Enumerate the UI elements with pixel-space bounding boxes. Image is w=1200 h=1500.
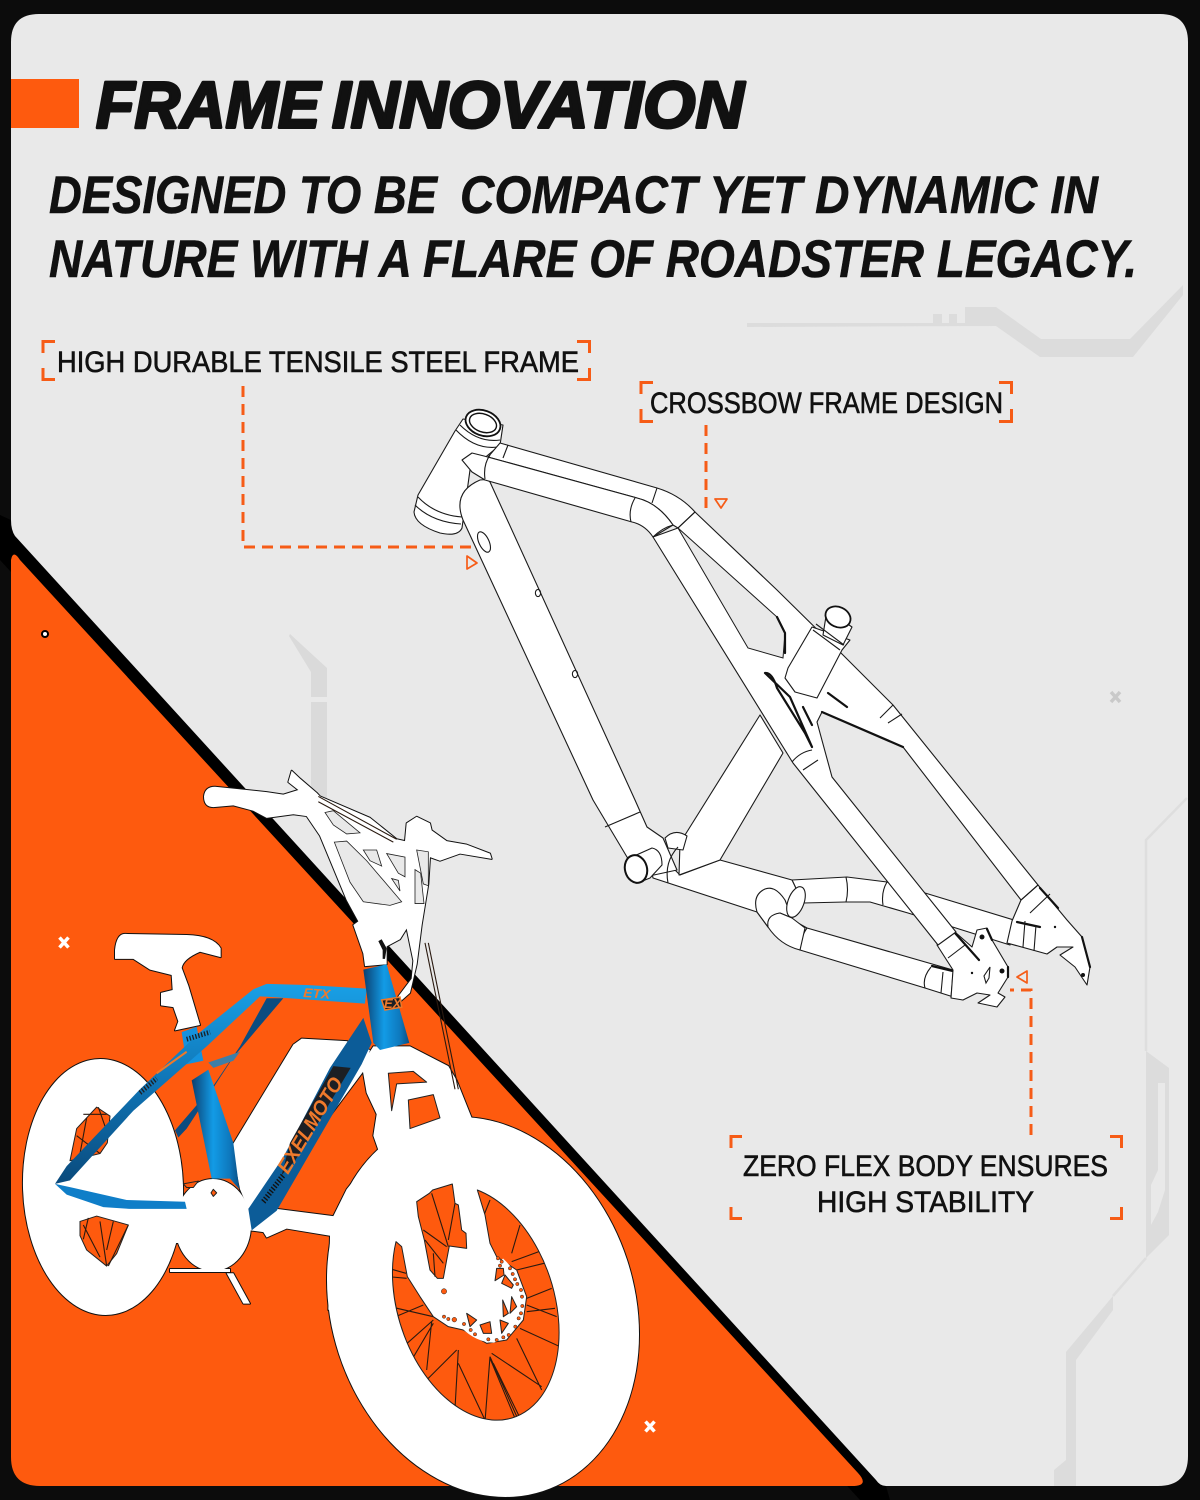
arrow: crossbow frame bbox=[715, 499, 727, 508]
head tube bbox=[414, 405, 504, 534]
front wheel openings and spokes bbox=[388, 1184, 560, 1422]
blue frame bbox=[55, 964, 409, 1230]
brake rotor bbox=[441, 1257, 524, 1342]
arrow: zero flex body bbox=[1017, 971, 1027, 983]
title accent block bbox=[11, 79, 79, 128]
bike illustration bbox=[19, 771, 687, 1500]
near rear dropout bbox=[937, 928, 1008, 1007]
down tube bbox=[248, 1018, 372, 1230]
sparkle: white cross bottom bbox=[646, 1422, 654, 1432]
lower top tube bbox=[462, 453, 673, 537]
callout brackets and label: tensile steel frame: HIGH DURABLE TENSILE STEEL FRAME bbox=[57, 346, 579, 379]
seat tube strut bbox=[679, 715, 783, 875]
bottom bracket shell bbox=[622, 832, 687, 885]
handlebar openings and cables bbox=[318, 796, 458, 1089]
orange diagonal panel bbox=[11, 554, 863, 1486]
seat collar bbox=[785, 602, 854, 698]
top tube and seat stay bbox=[55, 984, 367, 1184]
callout brackets and label: zero flex body: ZERO FLEX BODY ENSURES bbox=[743, 1150, 1108, 1183]
decoration: circuit line top right bbox=[747, 285, 1183, 357]
sparkle: grey cross bbox=[1111, 692, 1120, 702]
bike silhouette outline bbox=[19, 771, 687, 1500]
title: INNOVATION bbox=[332, 68, 745, 142]
rear half details and blue frame bbox=[55, 796, 458, 1266]
bike silhouette fill bbox=[19, 771, 687, 1500]
callout brackets and label: zero flex body: HIGH STABILITY bbox=[817, 1186, 1034, 1219]
upper top tube bbox=[488, 443, 695, 528]
title: FRAME bbox=[96, 68, 322, 142]
leader line: crossbow frame bbox=[704, 425, 708, 508]
far chain stay bbox=[792, 877, 1017, 945]
frame logo ETX: ETX bbox=[303, 985, 332, 1002]
seat stay and crossbow gusset bbox=[653, 512, 1038, 945]
subtitle bbox=[49, 166, 1137, 289]
head tube logo: EX bbox=[384, 996, 403, 1011]
far rear dropout bbox=[1007, 885, 1090, 985]
sparkle: white dot bbox=[42, 631, 48, 637]
decoration: circuit line centre left bbox=[289, 634, 327, 815]
seat collar bbox=[182, 1027, 203, 1064]
lower chain stay bbox=[768, 913, 963, 1000]
chain stay yoke bbox=[756, 884, 809, 950]
callout brackets and label: zero flex body bbox=[731, 1136, 1122, 1219]
subtitle: COMPACT YET DYNAMIC IN bbox=[460, 166, 1100, 225]
down tube decal bbox=[282, 1066, 351, 1175]
callout brackets and label: crossbow frame: CROSSBOW FRAME DESIGN bbox=[650, 387, 1003, 420]
near chain stay bbox=[645, 840, 803, 927]
gusset strut bbox=[208, 1052, 240, 1068]
subtitle: DESIGNED TO BE bbox=[49, 166, 438, 225]
rear wheel openings bbox=[70, 1107, 128, 1266]
frame logo EXELMOTO: EXELMOTO bbox=[273, 1073, 348, 1178]
leader line: zero flex body bbox=[1010, 990, 1031, 1135]
seat tube bbox=[192, 1070, 239, 1189]
down tube bbox=[460, 480, 677, 878]
chain stay bbox=[55, 1184, 187, 1209]
sparkle: white cross left bbox=[60, 938, 68, 948]
title bbox=[96, 68, 745, 142]
body openings bbox=[183, 1071, 440, 1196]
under stay bbox=[175, 998, 283, 1137]
head tube bbox=[363, 964, 409, 1050]
decoration: circuit line right side bbox=[1054, 798, 1187, 1486]
frame line drawing bbox=[414, 405, 1090, 1007]
leader line: tensile steel frame bbox=[243, 386, 472, 547]
arrow: tensile steel frame bbox=[467, 556, 477, 569]
